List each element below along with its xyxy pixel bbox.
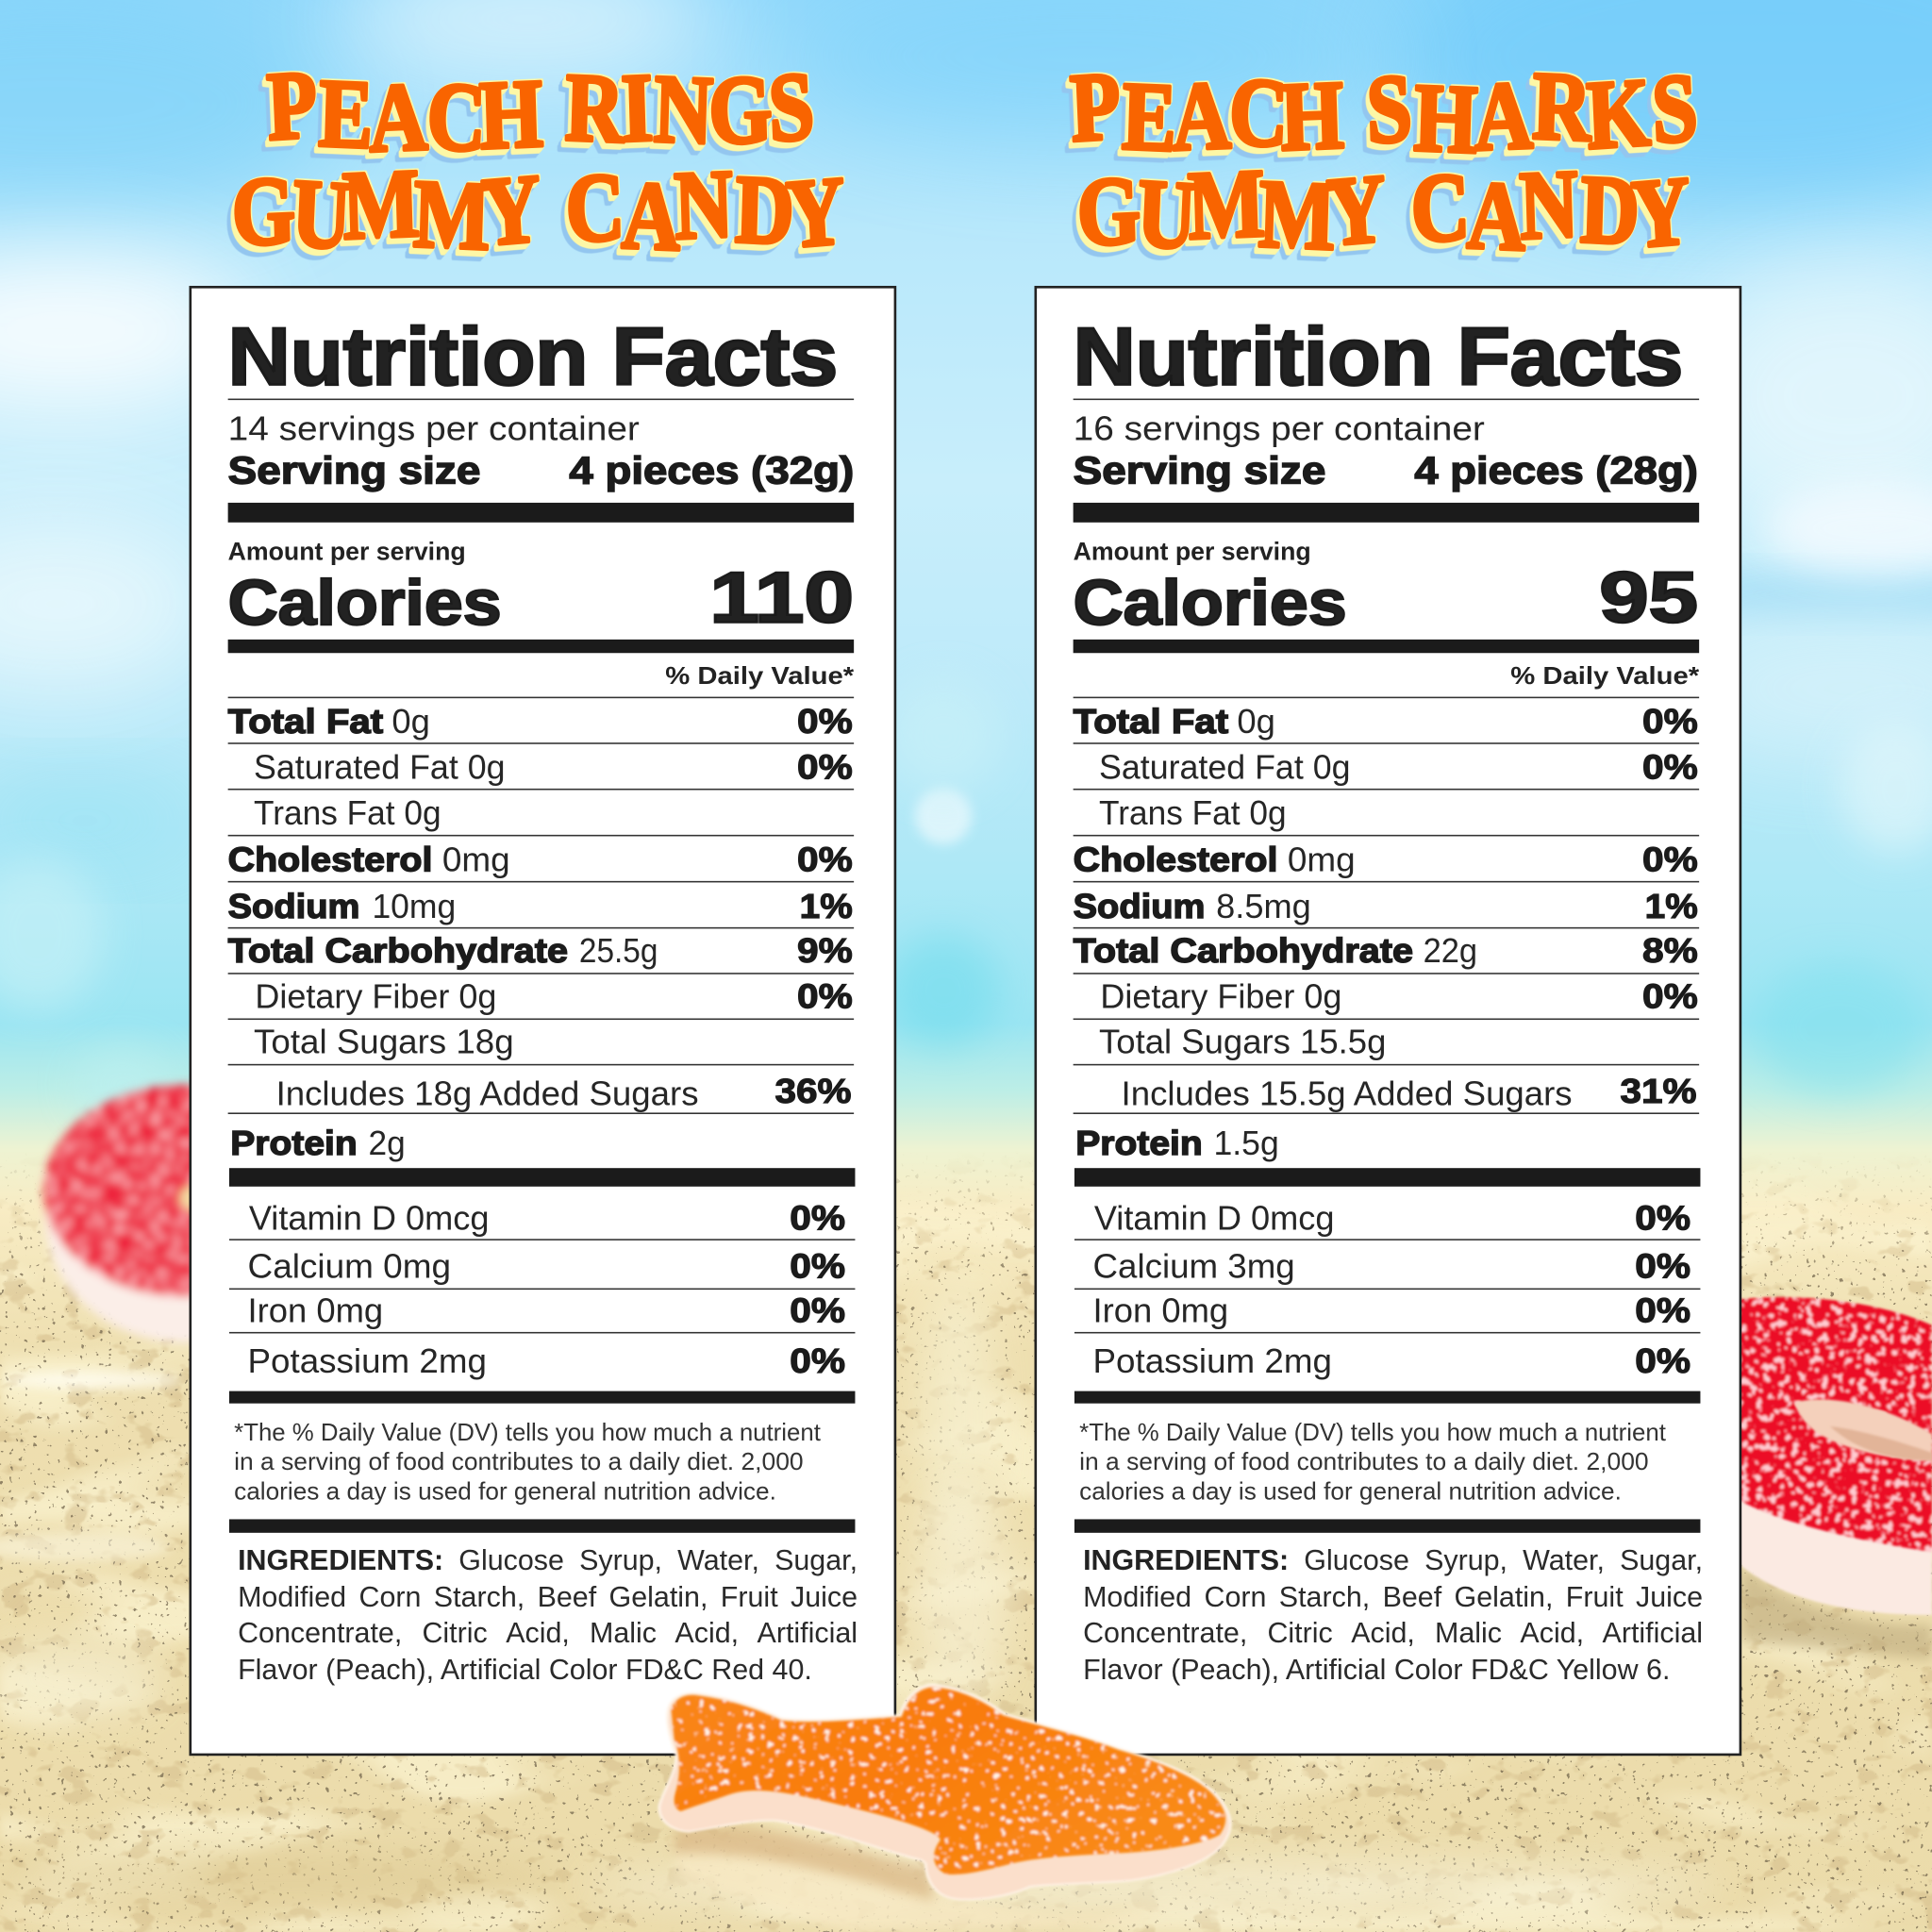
ingredients — [1083, 1542, 1711, 1697]
row: potassium: 0% — [1635, 1341, 1690, 1380]
row: cholesterol: 0mg — [1288, 840, 1356, 878]
row: total carbohydrate — [1074, 931, 1698, 970]
row: sodium: 8.5mg — [1216, 887, 1311, 925]
row: total fat: Total Fat — [1074, 702, 1228, 741]
row: dietary fiber: 0% — [797, 976, 853, 1015]
heading: Nutrition Facts: Nutrition Facts — [1074, 312, 1683, 403]
serving size row: 4 pieces (32g) — [569, 449, 854, 492]
row: cholesterol: Cholesterol — [228, 840, 432, 878]
calories row — [1074, 558, 1698, 639]
row: potassium — [248, 1341, 845, 1380]
row: cholesterol: 0% — [797, 840, 853, 878]
row: cholesterol — [1074, 840, 1698, 878]
row: total fat: 0g — [1237, 702, 1275, 741]
panel: peach rings nutrition label — [191, 287, 895, 1755]
row: saturated fat: 0% — [1642, 747, 1698, 786]
footnote: in a serving of food contributes to a daily diet. 2,000 — [1079, 1447, 1649, 1475]
title: Peach Sharks Gummy Candy: PEACH SHARKS — [1068, 51, 1700, 174]
footnote: *The % Daily Value (DV) tells you how much a nutrient — [1079, 1418, 1667, 1446]
row: calcium: 0% — [1635, 1246, 1690, 1285]
amount per serving: Amount per serving — [228, 538, 466, 566]
row: dietary fiber: Dietary Fiber 0g — [255, 976, 496, 1015]
row: iron — [248, 1291, 845, 1329]
ingredients — [238, 1542, 866, 1697]
row: sodium: 10mg — [372, 887, 456, 925]
row: sodium: Sodium — [228, 887, 359, 925]
row: total carbohydrate: 9% — [797, 931, 853, 970]
ingredients: Concentrate, Citric Acid, Malic Acid, Artificial — [238, 1617, 858, 1649]
serving size row: Serving size — [228, 449, 480, 492]
row: saturated fat — [1099, 747, 1698, 786]
row: saturated fat: 0% — [797, 747, 853, 786]
footnote: calories a day is used for general nutrition advice. — [234, 1477, 776, 1506]
candy: sugared orange peach shark — [659, 1685, 1230, 1932]
serving size row — [1074, 449, 1698, 492]
row: added sugars: Includes 18g Added Sugars — [276, 1074, 699, 1113]
row: protein: Protein — [1075, 1124, 1203, 1162]
row: total carbohydrate: 8% — [1642, 931, 1698, 970]
footnote: in a serving of food contributes to a daily diet. 2,000 — [234, 1447, 804, 1475]
row: iron — [1093, 1291, 1690, 1329]
footnote: *The % Daily Value (DV) tells you how much a nutrient — [234, 1418, 822, 1446]
row: sodium: Sodium — [1074, 887, 1205, 925]
panel: peach sharks nutrition label — [1036, 287, 1740, 1755]
row: vitamin d — [1094, 1199, 1690, 1238]
row: total carbohydrate: 25.5g — [579, 931, 658, 970]
row: potassium: Potassium 2mg — [1093, 1341, 1332, 1380]
candy: blurred red peach ring at left — [44, 1085, 324, 1342]
row: iron: 0% — [790, 1291, 845, 1329]
row: dietary fiber — [255, 976, 853, 1015]
row: total carbohydrate — [228, 931, 853, 970]
row: vitamin d: Vitamin D 0mcg — [249, 1199, 490, 1238]
row: saturated fat: Saturated Fat 0g — [1099, 747, 1351, 786]
row: vitamin d: Vitamin D 0mcg — [1094, 1199, 1335, 1238]
calories row: Calories — [1074, 568, 1347, 639]
candy: sugared red peach ring at right — [1736, 1297, 1932, 1660]
row: protein — [230, 1124, 406, 1162]
row: potassium — [1093, 1341, 1690, 1380]
row: dietary fiber — [1100, 976, 1698, 1015]
row: total fat: 0% — [1642, 702, 1698, 741]
row: total carbohydrate: 22g — [1424, 931, 1477, 970]
title: Peach Sharks Gummy Candy — [1068, 51, 1700, 272]
row: vitamin d: 0% — [790, 1199, 845, 1238]
amount per serving: Amount per serving — [1074, 538, 1311, 566]
row: saturated fat: Saturated Fat 0g — [254, 747, 506, 786]
row: vitamin d — [249, 1199, 845, 1238]
row: vitamin d: 0% — [1635, 1199, 1690, 1238]
row: total carbohydrate: Total Carbohydrate — [1074, 931, 1413, 970]
row: potassium: 0% — [790, 1341, 845, 1380]
servings per container: 16 servings per container — [1074, 408, 1485, 447]
row: total fat: 0% — [797, 702, 853, 741]
footnote: calories a day is used for general nutrition advice. — [1079, 1477, 1622, 1506]
heading: Nutrition Facts: Nutrition Facts — [228, 312, 838, 403]
row: trans fat: Trans Fat 0g — [254, 793, 441, 832]
row: iron: 0% — [1635, 1291, 1690, 1329]
row: dietary fiber: 0% — [1642, 976, 1698, 1015]
row: cholesterol: 0% — [1642, 840, 1698, 878]
row: sodium — [228, 887, 853, 925]
row: total sugars: Total Sugars 18g — [254, 1023, 514, 1061]
ingredients: Concentrate, Citric Acid, Malic Acid, Artificial — [1083, 1617, 1703, 1649]
row: dietary fiber: Dietary Fiber 0g — [1100, 976, 1341, 1015]
daily value heading: % Daily Value* — [1510, 661, 1700, 690]
row: calcium — [248, 1246, 845, 1285]
title: Peach Rings Gummy Candy: PEACH RINGS — [265, 49, 816, 173]
ingredients: Flavor (Peach), Artificial Color FD&C Yellow 6. — [1083, 1654, 1670, 1686]
row: calcium: Calcium 3mg — [1093, 1246, 1295, 1285]
row: protein: Protein — [230, 1124, 358, 1162]
title: Peach Sharks Gummy Candy: GUMMY CANDY — [1075, 148, 1693, 272]
row: cholesterol: 0mg — [442, 840, 510, 878]
servings per container: 14 servings per container — [228, 408, 640, 447]
calories row — [228, 558, 854, 639]
row: total fat — [1074, 702, 1698, 741]
footnote — [234, 1418, 822, 1506]
row: sodium — [1074, 887, 1698, 925]
row: calcium: 0% — [790, 1246, 845, 1285]
row: saturated fat — [254, 747, 853, 786]
row: added sugars: 36% — [775, 1072, 852, 1110]
row: sodium: 1% — [1645, 887, 1698, 925]
ingredients: INGREDIENTS: Glucose Syrup, Water, Sugar, — [1083, 1544, 1703, 1576]
title: Peach Rings Gummy Candy: GUMMY CANDY — [230, 148, 848, 272]
row: calcium: Calcium 0mg — [248, 1246, 451, 1285]
row: total fat: Total Fat — [228, 702, 383, 741]
row: total fat — [228, 702, 853, 741]
serving size row — [228, 449, 854, 492]
footnote — [1079, 1418, 1667, 1506]
row: trans fat: Trans Fat 0g — [1099, 793, 1287, 832]
ingredients: Flavor (Peach), Artificial Color FD&C Red 40. — [238, 1654, 812, 1686]
row: protein — [1075, 1124, 1279, 1162]
row: total sugars: Total Sugars 15.5g — [1099, 1023, 1386, 1061]
row: protein: 2g — [369, 1124, 406, 1162]
row: sodium: 1% — [800, 887, 853, 925]
row: added sugars: 31% — [1621, 1072, 1697, 1110]
row: added sugars: Includes 15.5g Added Sugars — [1122, 1074, 1573, 1113]
serving size row: Serving size — [1074, 449, 1325, 492]
row: added sugars — [276, 1072, 852, 1113]
row: calcium — [1093, 1246, 1690, 1285]
calories row: Calories — [228, 568, 502, 639]
row: total fat: 0g — [391, 702, 430, 741]
ingredients: Modified Corn Starch, Beef Gelatin, Fruit Juice — [238, 1580, 858, 1612]
row: cholesterol: Cholesterol — [1074, 840, 1277, 878]
ingredients: INGREDIENTS: Glucose Syrup, Water, Sugar, — [238, 1544, 858, 1576]
calories row: 110 — [709, 558, 854, 639]
row: iron: Iron 0mg — [1093, 1291, 1228, 1329]
title: Peach Rings Gummy Candy — [230, 49, 848, 272]
ingredients: Modified Corn Starch, Beef Gelatin, Fruit Juice — [1083, 1580, 1703, 1612]
daily value heading: % Daily Value* — [665, 661, 855, 690]
row: iron: Iron 0mg — [248, 1291, 383, 1329]
row: total carbohydrate: Total Carbohydrate — [228, 931, 568, 970]
serving size row: 4 pieces (28g) — [1414, 449, 1698, 492]
row: cholesterol — [228, 840, 853, 878]
row: potassium: Potassium 2mg — [248, 1341, 487, 1380]
row: protein: 1.5g — [1214, 1124, 1279, 1162]
calories row: 95 — [1599, 558, 1698, 639]
